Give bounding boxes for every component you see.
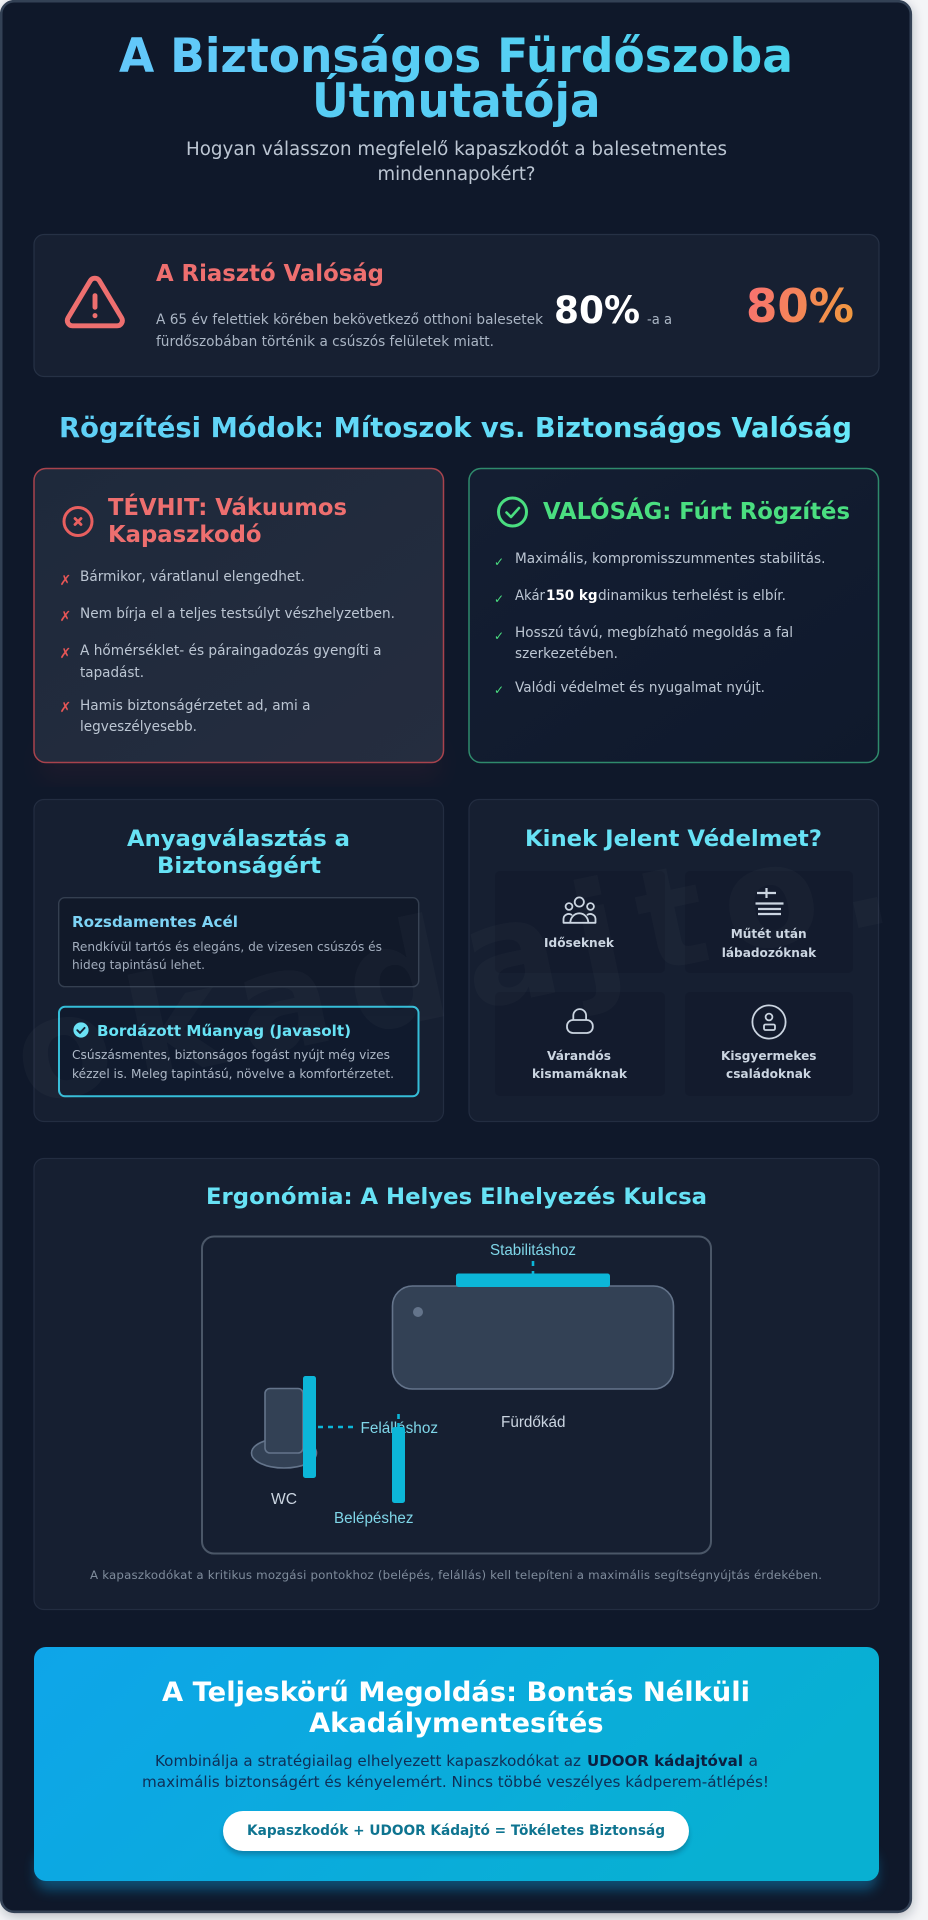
icon: people xyxy=(564,897,596,923)
toilet xyxy=(252,1388,316,1508)
cell: expecting mothers: Várandós xyxy=(547,1049,611,1063)
header xyxy=(119,29,793,185)
grab bar: stability: Stabilitáshoz xyxy=(490,1242,576,1259)
icon: person in circle xyxy=(752,1005,786,1039)
panel: CTA xyxy=(34,1647,879,1881)
CTA text: maximális biztonságért és kényelemért. Nincs többé veszélyes kádperem-átlépés! xyxy=(142,1773,769,1791)
cell: seniors xyxy=(495,871,665,973)
myth list: tapadást. xyxy=(80,665,144,681)
material: stainless steel: Rendkívül tartós és elegáns, de vizesen csúszós és xyxy=(72,940,382,954)
CTA heading: Akadálymentesítés xyxy=(309,1708,604,1739)
who heading: Kinek Jelent Védelmet? xyxy=(525,826,822,852)
material: ribbed plastic: kézzel is. Meleg tapintású, növelve a komfortérzetet. xyxy=(72,1067,394,1081)
button xyxy=(223,1811,689,1851)
materials heading xyxy=(127,826,350,879)
ergonomics heading: Ergonómia: A Helyes Elhelyezés Kulcsa xyxy=(206,1185,707,1210)
reality list: Akár xyxy=(515,588,545,604)
panel: ergonomics xyxy=(34,1158,879,1610)
title: A Biztonságos Fürdőszoba xyxy=(119,29,793,84)
icon: check circle xyxy=(498,498,526,526)
panel: reality xyxy=(469,468,878,762)
icon: x circle xyxy=(64,508,92,536)
bathtub xyxy=(392,1286,674,1431)
myth list: legveszélyesebb. xyxy=(80,719,197,735)
panel: myth xyxy=(34,468,444,762)
reality list: 150 kg xyxy=(546,588,598,604)
caption: A kapaszkodókat a kritikus mozgási pontokhoz (belépés, felállás) kell telepíteni a maximális segítségnyújtás érdekében. xyxy=(90,1568,822,1582)
alert text: -a a xyxy=(647,312,672,328)
CTA text: Kombinálja a stratégiailag elhelyezett kapaszkodókat az xyxy=(155,1752,581,1770)
myth marks: ✗ xyxy=(60,609,71,625)
button: Kapaszkodók + UDOOR Kádajtó = Tökéletes Biztonság xyxy=(247,1823,665,1839)
toilet: WC xyxy=(271,1491,297,1508)
grab bar: entering: Belépéshez xyxy=(334,1510,414,1527)
reality list: dinamikus terhelést is elbír. xyxy=(598,588,786,604)
myth heading: Kapaszkodó xyxy=(108,520,262,548)
cell: recovering: lábadozóknak xyxy=(722,946,817,960)
cell: families: családoknak xyxy=(726,1067,812,1081)
cell: recovering xyxy=(685,871,853,973)
material: stainless steel: Rozsdamentes Acél xyxy=(72,913,238,931)
reality marks: ✓ xyxy=(494,683,504,697)
title xyxy=(119,29,793,129)
reality marks: ✓ xyxy=(494,555,504,569)
icon: check badge xyxy=(73,1022,89,1038)
material: ribbed plastic xyxy=(59,1007,418,1096)
material: stainless steel: hideg tapintású lehet. xyxy=(72,958,205,972)
diagram xyxy=(202,1236,711,1554)
material: ribbed plastic: Csúszásmentes, biztonságos fogást nyújt még vizes xyxy=(72,1048,390,1062)
inline stat: 80% xyxy=(554,289,640,332)
alert heading: A Riasztó Valóság xyxy=(156,261,384,287)
CTA text: UDOOR kádajtóval xyxy=(587,1752,743,1770)
alert text: fürdőszobában történik a csúszós felületek miatt. xyxy=(156,334,494,350)
myth marks xyxy=(60,573,71,716)
grab bar: standing up xyxy=(303,1376,438,1478)
section heading: mounting: Rögzítési Módok: Mítoszok vs. Biztonságos Valóság xyxy=(59,412,852,444)
reality marks: ✓ xyxy=(494,592,504,606)
cell: families: Kisgyermekes xyxy=(721,1049,816,1063)
grab bar: standing up: Felálláshoz xyxy=(360,1420,438,1437)
glow: CTA xyxy=(36,1852,877,1890)
panel: materials xyxy=(34,800,444,1122)
myth list: Hamis biztonságérzetet ad, ami a xyxy=(80,698,310,714)
cell: expecting mothers: kismamáknak xyxy=(532,1067,628,1081)
reality list: Maximális, kompromisszummentes stabilitás. xyxy=(515,551,826,567)
subtitle: Hogyan válasszon megfelelő kapaszkodót a balesetmentes xyxy=(186,139,727,160)
alert text xyxy=(156,312,672,350)
myth heading xyxy=(108,493,347,548)
cell: expecting mothers xyxy=(495,992,665,1096)
material: ribbed plastic: Bordázott Műanyag (Javasolt) xyxy=(97,1022,351,1040)
CTA text xyxy=(142,1752,769,1791)
myth marks: ✗ xyxy=(60,646,71,662)
myth list: Nem bírja el a teljes testsúlyt vészhelyzetben. xyxy=(80,606,395,622)
subtitle xyxy=(186,139,727,185)
grab bar: stability xyxy=(456,1242,610,1287)
material: stainless steel xyxy=(59,898,419,987)
CTA heading xyxy=(162,1677,750,1739)
materials heading: Anyagválasztás a xyxy=(127,826,350,852)
cell: families xyxy=(685,992,853,1096)
reality marks xyxy=(494,555,504,697)
title: Útmutatója xyxy=(312,74,600,129)
alert text: A 65 év felettiek körében bekövetkező otthoni balesetek xyxy=(156,312,544,328)
bathtub: Fürdőkád xyxy=(501,1414,566,1431)
CTA heading: A Teljeskörű Megoldás: Bontás Nélküli xyxy=(162,1677,750,1708)
panel: alert xyxy=(34,234,879,376)
watermark: okadajto. xyxy=(0,794,904,1138)
reality list xyxy=(515,551,826,696)
CTA text: a xyxy=(748,1752,758,1770)
glow: myth card xyxy=(40,745,440,780)
icon: warning triangle xyxy=(67,278,122,326)
button shadow xyxy=(223,1815,689,1855)
myth list: A hőmérséklet- és páraingadozás gyengíti a xyxy=(80,643,382,659)
big stat: 80% xyxy=(746,279,854,333)
myth marks: ✗ xyxy=(60,700,71,716)
reality list: Valódi védelmet és nyugalmat nyújt. xyxy=(515,680,765,696)
cell: seniors: Időseknek xyxy=(544,936,615,950)
icon: medical xyxy=(756,888,784,914)
reality heading: VALÓSÁG: Fúrt Rögzítés xyxy=(543,497,850,525)
myth marks: ✗ xyxy=(60,573,71,589)
myth list xyxy=(80,569,395,735)
subtitle: mindennapokért? xyxy=(378,164,536,185)
reality list: szerkezetében. xyxy=(515,646,618,662)
icon: bag xyxy=(567,1009,593,1033)
panel: who xyxy=(469,800,878,1122)
reality list: Hosszú távú, megbízható megoldás a fal xyxy=(515,625,793,641)
myth heading: TÉVHIT: Vákuumos xyxy=(108,493,347,521)
cell: recovering: Műtét után xyxy=(731,927,807,941)
materials heading: Biztonságért xyxy=(157,853,321,879)
myth list: Bármikor, váratlanul elengedhet. xyxy=(80,569,305,585)
reality marks: ✓ xyxy=(494,629,504,643)
grab bar: entering xyxy=(334,1414,414,1527)
